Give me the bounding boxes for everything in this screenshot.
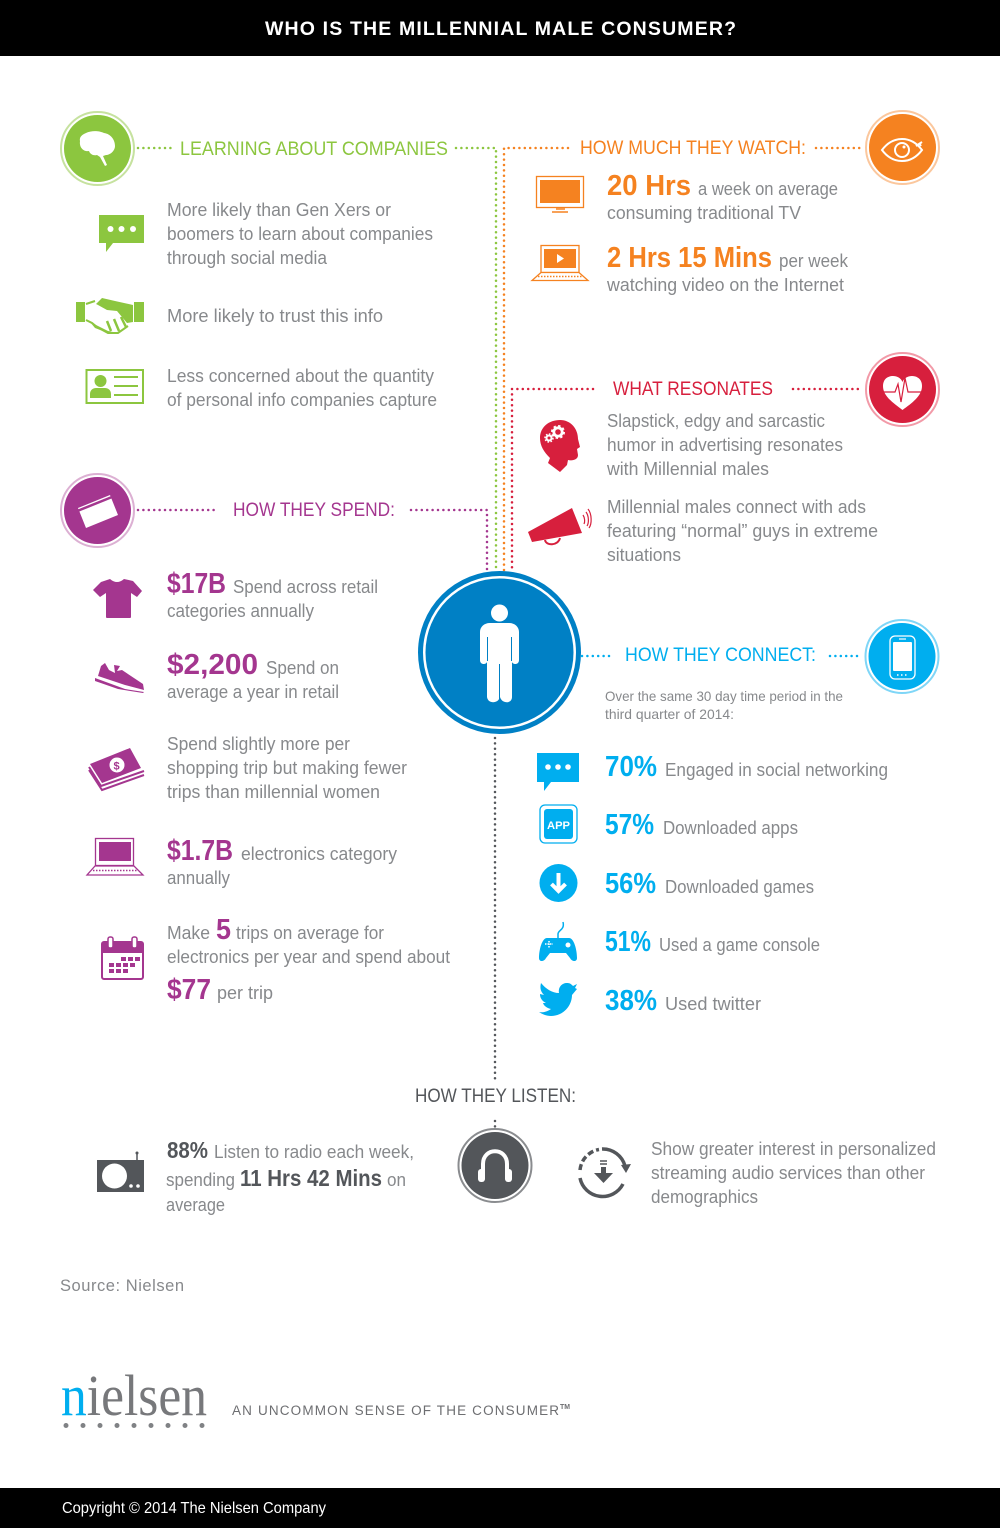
stat: games: Downloaded games xyxy=(665,877,814,897)
icon: game controller xyxy=(539,922,577,961)
text: traditional tv: 20 Hrs xyxy=(607,170,691,202)
text: time period intro xyxy=(605,688,843,722)
text: trips per year: Make xyxy=(167,923,210,943)
icon: brain badge xyxy=(61,112,134,185)
source note: Source: Nielsen xyxy=(60,1277,184,1295)
stat: console: 51% xyxy=(605,926,651,958)
text: radio listening: 11 Hrs 42 Mins xyxy=(240,1165,382,1191)
text: shopping trips: Spend slightly more per xyxy=(167,734,350,754)
panel: how much they watch xyxy=(532,111,939,295)
text: yearly retail: Spend on xyxy=(266,658,339,678)
stat: twitter xyxy=(605,985,761,1017)
text: electronics xyxy=(167,835,397,888)
stat: console xyxy=(605,926,820,958)
stat: twitter: 38% xyxy=(605,985,657,1017)
text: traditional tv: a week on average xyxy=(698,179,838,199)
copyright: Copyright © 2014 The Nielsen Company xyxy=(62,1500,326,1517)
panel: how they spend xyxy=(61,474,450,1006)
stat: games xyxy=(605,868,814,900)
text: trust: More likely to trust this info xyxy=(167,306,383,326)
text: social media: through social media xyxy=(167,248,328,268)
text: yearly retail: average a year in retail xyxy=(167,682,339,702)
text: personal info: Less concerned about the quantity xyxy=(167,366,434,386)
heading: HOW THEY SPEND: xyxy=(233,500,395,521)
panel: how they connect xyxy=(537,620,938,1017)
text: humor xyxy=(606,411,843,479)
text: radio listening: Listen to radio each week, xyxy=(214,1142,414,1162)
stat: apps xyxy=(605,809,798,841)
text: social media: boomers to learn about companies xyxy=(167,224,433,244)
panel: learning about companies xyxy=(61,112,448,410)
text: trips per year: trips on average for xyxy=(236,923,384,943)
icon: download arrow xyxy=(540,864,578,902)
text: electronics: electronics category xyxy=(241,844,397,864)
icon: app tile: APP xyxy=(547,820,570,832)
text: trips per year xyxy=(167,914,450,1006)
text: social media xyxy=(167,200,433,268)
header band xyxy=(0,0,1000,56)
icon: t-shirt xyxy=(93,579,142,618)
text: radio listening xyxy=(166,1137,414,1215)
icon: eye badge xyxy=(866,111,939,184)
icon: megaphone xyxy=(528,508,591,544)
stat: console: Used a game console xyxy=(659,935,820,955)
stat: social networking: Engaged in social networking xyxy=(665,760,888,780)
text: personal info: of personal info companies capture xyxy=(167,390,437,410)
nielsen logo: nielsen xyxy=(61,1363,207,1428)
icon: heart badge xyxy=(866,353,939,426)
text: electronics: $1.7B xyxy=(167,835,233,867)
text: shopping trips: shopping trip but making fewer xyxy=(167,758,407,778)
text: humor: Slapstick, edgy and sarcastic xyxy=(607,411,825,431)
text: yearly retail: $2,200 xyxy=(167,649,258,681)
text: internet video: watching video on the Internet xyxy=(606,275,844,295)
text: retail spend: categories annually xyxy=(167,601,314,621)
text: trips per year: electronics per year and spend about xyxy=(167,947,450,967)
stat: games: 56% xyxy=(605,868,656,900)
icon: id card xyxy=(86,370,143,403)
text: normal guys xyxy=(607,497,878,565)
stat: social networking xyxy=(605,751,888,783)
icon: speech bubble xyxy=(99,215,144,252)
heading: HOW THEY CONNECT: xyxy=(625,645,816,666)
title: WHO IS THE MILLENNIAL MALE CONSUMER? xyxy=(265,18,736,40)
tagline: TM xyxy=(560,1404,570,1411)
icon: laptop xyxy=(87,838,143,875)
text: traditional tv: consuming traditional TV xyxy=(607,203,801,223)
text: streaming audio: streaming audio services than other xyxy=(651,1163,925,1183)
connector lines to centre figure xyxy=(411,148,593,1129)
icon: streaming download xyxy=(580,1149,631,1196)
text: traditional tv xyxy=(607,170,838,223)
text: shopping trips xyxy=(167,734,407,802)
tagline: AN UNCOMMON SENSE OF THE CONSUMER xyxy=(232,1403,559,1418)
footer band xyxy=(0,1488,1000,1528)
text: social media: More likely than Gen Xers or xyxy=(167,200,391,220)
text: time period intro: third quarter of 2014: xyxy=(605,706,734,722)
text: streaming audio: demographics xyxy=(651,1187,758,1207)
text: streaming audio: Show greater interest in personalized xyxy=(651,1139,936,1159)
icon: speech bubble xyxy=(537,753,579,791)
text: humor: humor in advertising resonates xyxy=(607,435,843,455)
text: radio listening: on xyxy=(387,1170,406,1190)
heading: HOW THEY LISTEN: xyxy=(415,1086,576,1107)
text: radio listening: spending xyxy=(166,1170,235,1190)
heading: LEARNING ABOUT COMPANIES xyxy=(180,139,448,160)
icon: laptop video xyxy=(532,246,588,280)
panel: what resonates xyxy=(528,353,939,565)
icon: sneaker xyxy=(95,663,144,693)
text: trips per year: per trip xyxy=(217,983,273,1003)
text: radio listening: average xyxy=(166,1195,225,1215)
text: normal guys: situations xyxy=(607,545,681,565)
text: shopping trips: trips than millennial women xyxy=(167,782,380,802)
icon: television xyxy=(536,176,584,212)
icon: central male figure xyxy=(420,574,578,732)
text: electronics: annually xyxy=(167,868,230,888)
icon: headphones badge xyxy=(458,1129,532,1202)
icon: radio xyxy=(97,1152,144,1192)
text: normal guys: Millennial males connect with ads xyxy=(607,497,866,517)
text: normal guys: featuring “normal” guys in extreme xyxy=(607,521,878,541)
text: internet video: per week xyxy=(779,251,849,271)
text: internet video xyxy=(606,242,849,295)
stat: apps: Downloaded apps xyxy=(663,818,798,838)
stat: apps: 57% xyxy=(605,809,654,841)
text: personal info xyxy=(167,366,437,410)
icon: smartphone badge xyxy=(866,620,938,693)
icon: calendar xyxy=(102,937,143,979)
text: yearly retail xyxy=(167,649,339,702)
icon: credit card badge xyxy=(61,474,134,547)
text: retail spend: Spend across retail xyxy=(233,577,378,597)
stat: twitter: Used twitter xyxy=(665,994,761,1014)
icon: app tile xyxy=(540,805,577,843)
text: streaming audio xyxy=(651,1139,936,1207)
heading: HOW MUCH THEY WATCH: xyxy=(580,138,806,159)
panel: how they listen xyxy=(97,1086,936,1215)
stat: social networking: 70% xyxy=(605,751,657,783)
text: trips per year: $77 xyxy=(167,974,211,1006)
icon: handshake xyxy=(76,298,144,333)
icon: head with gears xyxy=(540,420,580,472)
text: retail spend xyxy=(167,568,378,621)
text: time period intro: Over the same 30 day time period in the xyxy=(605,688,843,704)
text: humor: with Millennial males xyxy=(606,459,769,479)
text: retail spend: $17B xyxy=(167,568,226,600)
text: radio listening: 88% xyxy=(167,1137,208,1163)
icon: stack of cash: $ xyxy=(114,760,120,772)
heading: WHAT RESONATES xyxy=(613,379,773,400)
text: trips per year: 5 xyxy=(216,914,231,946)
icon: twitter bird xyxy=(539,983,577,1016)
icon: stack of cash xyxy=(89,748,144,790)
text: internet video: 2 Hrs 15 Mins xyxy=(607,242,772,274)
